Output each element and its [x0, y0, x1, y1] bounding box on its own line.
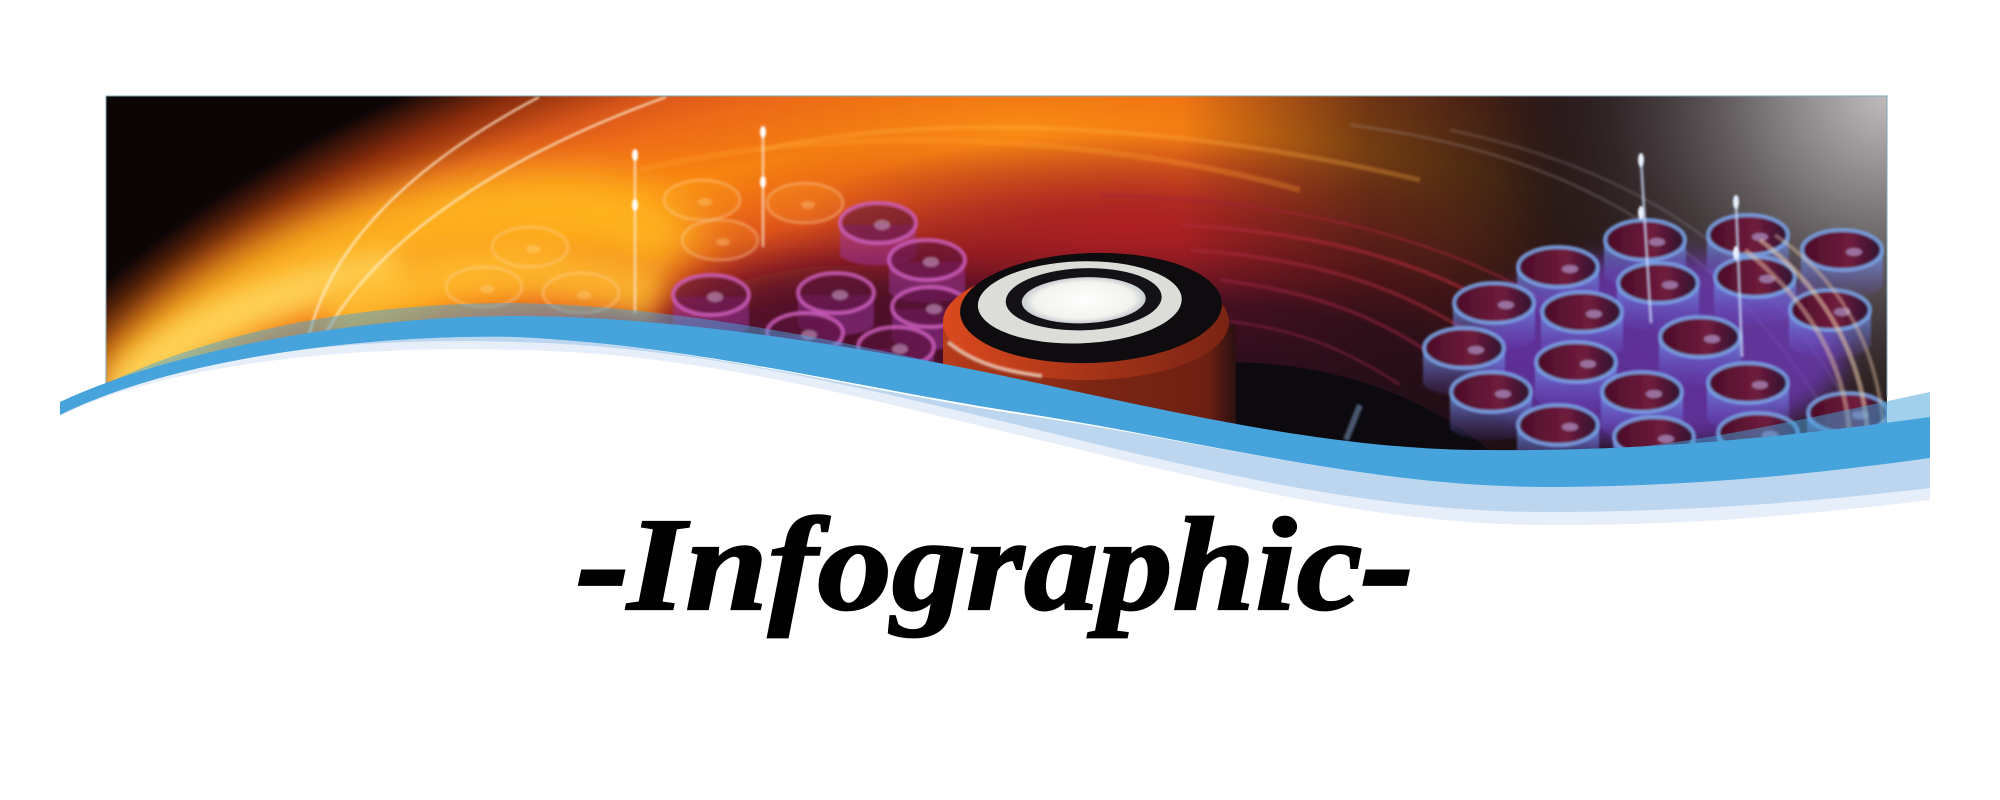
translucent upper band left — [105, 303, 939, 390]
title: -Infographic - — [578, 490, 1412, 638]
blue purple glow behind tubes — [1475, 255, 1845, 445]
black curved hose — [1236, 362, 1488, 450]
banner illustration and title — [60, 96, 1930, 638]
wave ribbon — [60, 303, 1930, 525]
pale ribbon band — [60, 337, 1930, 525]
blue tubes — [1420, 212, 1887, 450]
magenta tubes — [670, 200, 968, 362]
blue light streaks — [1638, 153, 1884, 450]
light blue ribbon band — [60, 337, 1930, 512]
translucent upper band right — [1600, 392, 1930, 451]
background: motion-blurred rings — [106, 96, 1887, 466]
motion streaks — [642, 123, 1840, 398]
centrifuge spindle — [943, 252, 1236, 424]
orange light streaks — [632, 126, 766, 313]
faded orange tubes — [446, 180, 843, 313]
panel outline — [106, 96, 1887, 397]
white arcs — [308, 97, 666, 340]
main blue band — [60, 316, 1930, 487]
panel: spinning centrifuge photo — [106, 96, 1889, 485]
